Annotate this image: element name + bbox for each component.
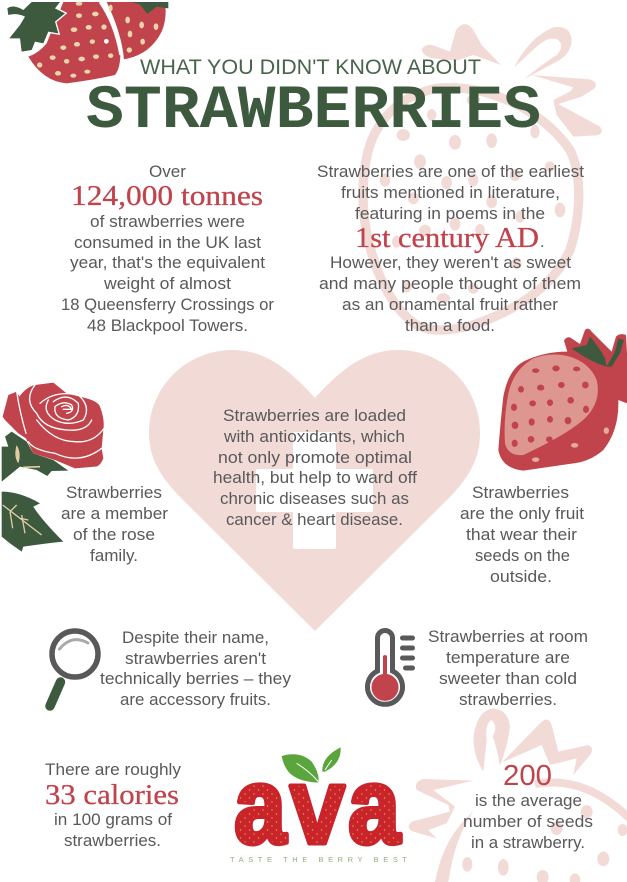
back strawberry bbox=[7, 2, 168, 83]
icon: strawberries top left bbox=[7, 2, 168, 83]
text block: antioxidants: health, but help to ward off bbox=[213, 469, 417, 487]
text block: literature: than a food. bbox=[405, 317, 495, 335]
text block: calories bbox=[45, 761, 182, 850]
text block: room temperature bbox=[428, 628, 588, 709]
text block: accessory fruits: technically berries – they bbox=[100, 670, 292, 688]
text block: calories: in 100 grams of bbox=[54, 811, 172, 829]
text block: room temperature: strawberries. bbox=[459, 691, 557, 709]
text block: accessory fruits: are accessory fruits. bbox=[120, 691, 271, 709]
logo wordmark: ava bbox=[232, 754, 403, 876]
text block: 200 seeds: in a strawberry. bbox=[471, 834, 585, 852]
text block: tonnes: weight of almost bbox=[103, 275, 231, 293]
text block: calories: There are roughly bbox=[45, 761, 182, 779]
text block: tonnes: 48 Blackpool Towers. bbox=[87, 317, 248, 335]
highlight: 33 calories: 33 calories bbox=[45, 779, 179, 811]
text block: tonnes: of strawberries were bbox=[90, 213, 245, 231]
background strawberry: top right bbox=[363, 24, 602, 330]
text block: rose family: family. bbox=[90, 547, 138, 565]
text block: tonnes: 18 Queensferry Crossings or bbox=[61, 296, 274, 314]
text block: 200 seeds: is the average bbox=[475, 792, 582, 810]
icon: magnifying glass bbox=[50, 631, 98, 706]
text block: room temperature: sweeter than cold bbox=[439, 670, 577, 688]
logo: ava bbox=[230, 747, 407, 876]
text block: literature: Strawberries are one of the earliest bbox=[317, 163, 584, 181]
text block: accessory fruits: strawberries aren't bbox=[125, 650, 266, 668]
text block: antioxidants: with antioxidants, which bbox=[223, 428, 405, 446]
text block: rose family: of the rose bbox=[73, 526, 155, 544]
text block: tonnes bbox=[61, 163, 274, 335]
text block: seeds outside: are the only fruit bbox=[460, 505, 584, 523]
text block: seeds outside: seeds on the bbox=[475, 547, 570, 565]
text block: antioxidants: cancer & heart disease. bbox=[226, 511, 403, 529]
heart with cross bbox=[149, 350, 480, 631]
text block: antioxidants: Strawberries are loaded bbox=[223, 407, 406, 425]
icon: thermometer bbox=[368, 631, 412, 704]
text block: room temperature: temperature are bbox=[446, 649, 570, 667]
icon: halved strawberry bbox=[498, 329, 627, 471]
text block: literature: featuring in poems in the bbox=[355, 205, 545, 223]
text block: tonnes: Over bbox=[149, 163, 187, 181]
text block: literature: However, they weren't as sweet bbox=[330, 254, 571, 272]
highlight: 200: 200 bbox=[503, 760, 552, 792]
text block: seeds outside: that wear their bbox=[466, 526, 578, 544]
title bbox=[86, 56, 541, 146]
title line 2: STRAWBERRIES bbox=[86, 77, 541, 146]
front strawberry bbox=[28, 2, 120, 83]
text block: rose family: are a member bbox=[61, 505, 169, 523]
text block: 200 seeds bbox=[463, 760, 593, 852]
background strawberry: bottom right bbox=[409, 708, 627, 882]
text block: seeds outside bbox=[460, 484, 584, 586]
text block: rose family: Strawberries bbox=[66, 484, 162, 502]
text block: literature: . bbox=[540, 233, 545, 251]
text block: antioxidants: chronic diseases such as bbox=[220, 490, 409, 508]
text block: accessory fruits bbox=[100, 629, 292, 709]
text block: literature: fruits mentioned in literature, bbox=[341, 184, 560, 202]
text block: 200 seeds: number of seeds bbox=[463, 813, 593, 831]
highlight: 1st century AD: 1st century AD bbox=[355, 222, 539, 254]
text block: literature: and many people thought of them bbox=[319, 275, 581, 293]
text block: accessory fruits: Despite their name, bbox=[122, 629, 269, 647]
text block: antioxidants bbox=[213, 407, 417, 529]
logo leaves bbox=[282, 747, 341, 783]
text block: literature: as an ornamental fruit rather bbox=[342, 296, 559, 314]
text block: seeds outside: Strawberries bbox=[472, 484, 569, 502]
icon: rose bbox=[2, 383, 104, 552]
text block: literature bbox=[317, 163, 584, 335]
text block: rose family bbox=[61, 484, 169, 565]
text block: seeds outside: outside. bbox=[490, 568, 552, 586]
text block: calories: strawberries. bbox=[64, 832, 161, 850]
text block: tonnes: consumed in the UK last bbox=[74, 234, 261, 252]
title line 1: WHAT YOU DIDN'T KNOW ABOUT bbox=[140, 56, 481, 79]
rose leaf bbox=[2, 492, 63, 552]
text block: tonnes: year, that's the equivalent bbox=[70, 254, 265, 272]
text block: room temperature: Strawberries at room bbox=[428, 628, 588, 646]
highlight: 124,000 tonnes: 124,000 tonnes bbox=[71, 180, 263, 212]
logo tagline: TASTE THE BERRY BEST bbox=[230, 855, 407, 864]
text block: antioxidants: not only promote optimal bbox=[218, 449, 412, 467]
